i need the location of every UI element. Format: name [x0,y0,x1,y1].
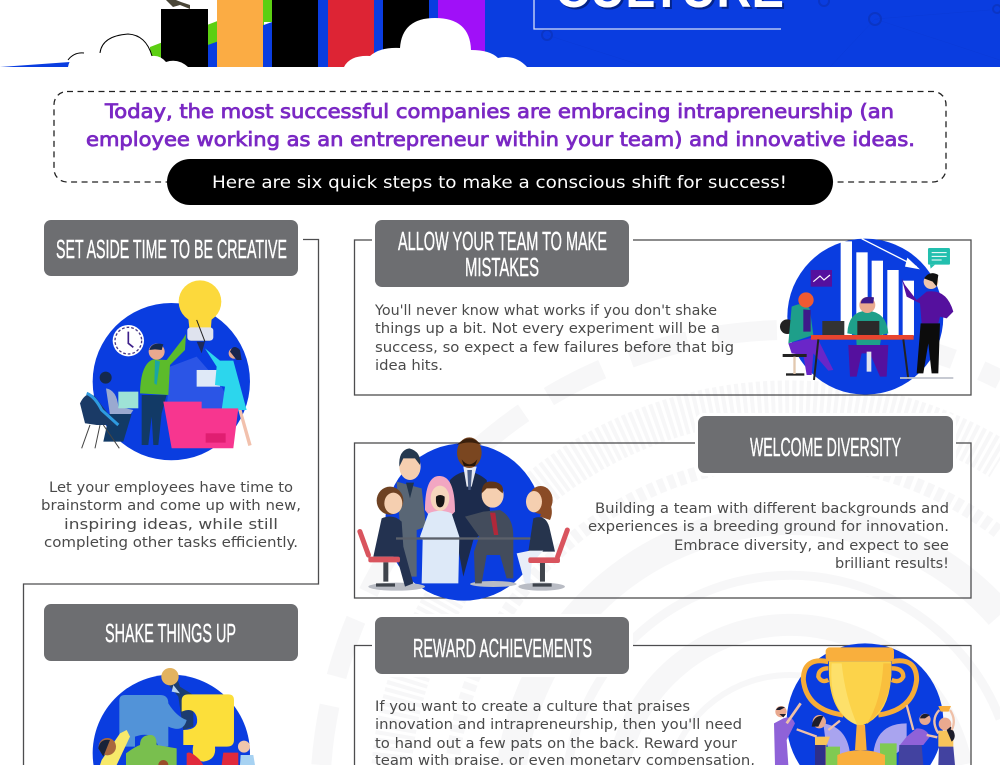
description: Embrace diversity, and expect to see [674,538,949,554]
background pattern [321,330,1000,765]
description: Building a team with different backgrounds and [595,501,949,517]
heading [44,220,298,276]
intro dashed box [54,92,946,205]
heading: SHAKE THINGS UP [105,618,236,648]
heading: MISTAKES [465,252,539,282]
illustration: trophy and team [774,643,955,765]
illustration: diverse team at table [357,437,571,601]
heading [372,217,633,290]
panel: allow your team to make mistakes [354,217,971,395]
description [41,480,301,551]
heading: REWARD ACHIEVEMENTS [413,633,592,663]
description: things up a bit. Not every experiment will be a [375,321,720,337]
description [375,699,755,765]
description: Let your employees have time to [49,480,293,496]
description: brilliant results! [835,556,949,572]
intro text: Today, the most successful companies are embracing intrapreneurship (an [104,100,894,123]
description: to hand out a few pats on the back. Reward your [375,736,737,752]
description: idea hits. [375,358,443,374]
title box [534,0,786,29]
illustration: falling bar chart team [780,239,953,395]
chart bars [161,0,485,67]
icon: figure on bar [166,0,190,9]
heading [695,413,956,476]
description: completing other tasks efficiently. [44,535,298,551]
illustration: team with puzzle [93,668,255,765]
description: You'll never know what works if you don't shake [374,303,717,319]
panel: shake things up [44,604,298,765]
heading: ALLOW YOUR TEAM TO MAKE [398,226,607,256]
panel: reward achievements [354,614,971,765]
description: brainstorm and come up with new, [41,498,301,514]
header banner [0,0,1000,67]
description: experiences is a breeding ground for innovation. [588,519,949,535]
description [588,501,949,572]
description: innovation and intrapreneurship, then you'll need [375,717,742,733]
network dots [542,0,1000,67]
description: inspiring ideas, while still [64,517,278,533]
panel: welcome diversity [354,413,971,601]
heading [44,604,298,661]
description [374,303,734,374]
description: If you want to create a culture that praises [375,699,690,715]
black pill [167,159,833,205]
intro text [86,100,915,151]
description: success, so expect a few failures before that big [375,340,734,356]
heading [372,614,633,677]
panel: set aside time [24,220,318,765]
cloud left [68,34,188,67]
heading: SET ASIDE TIME TO BE CREATIVE [56,234,287,264]
intro text: employee working as an entrepreneur within your team) and innovative ideas. [86,128,915,151]
black pill: Here are six quick steps to make a conscious shift for success! [212,173,787,192]
cloud right [344,18,527,67]
illustration: team with lightbulb [80,280,252,460]
